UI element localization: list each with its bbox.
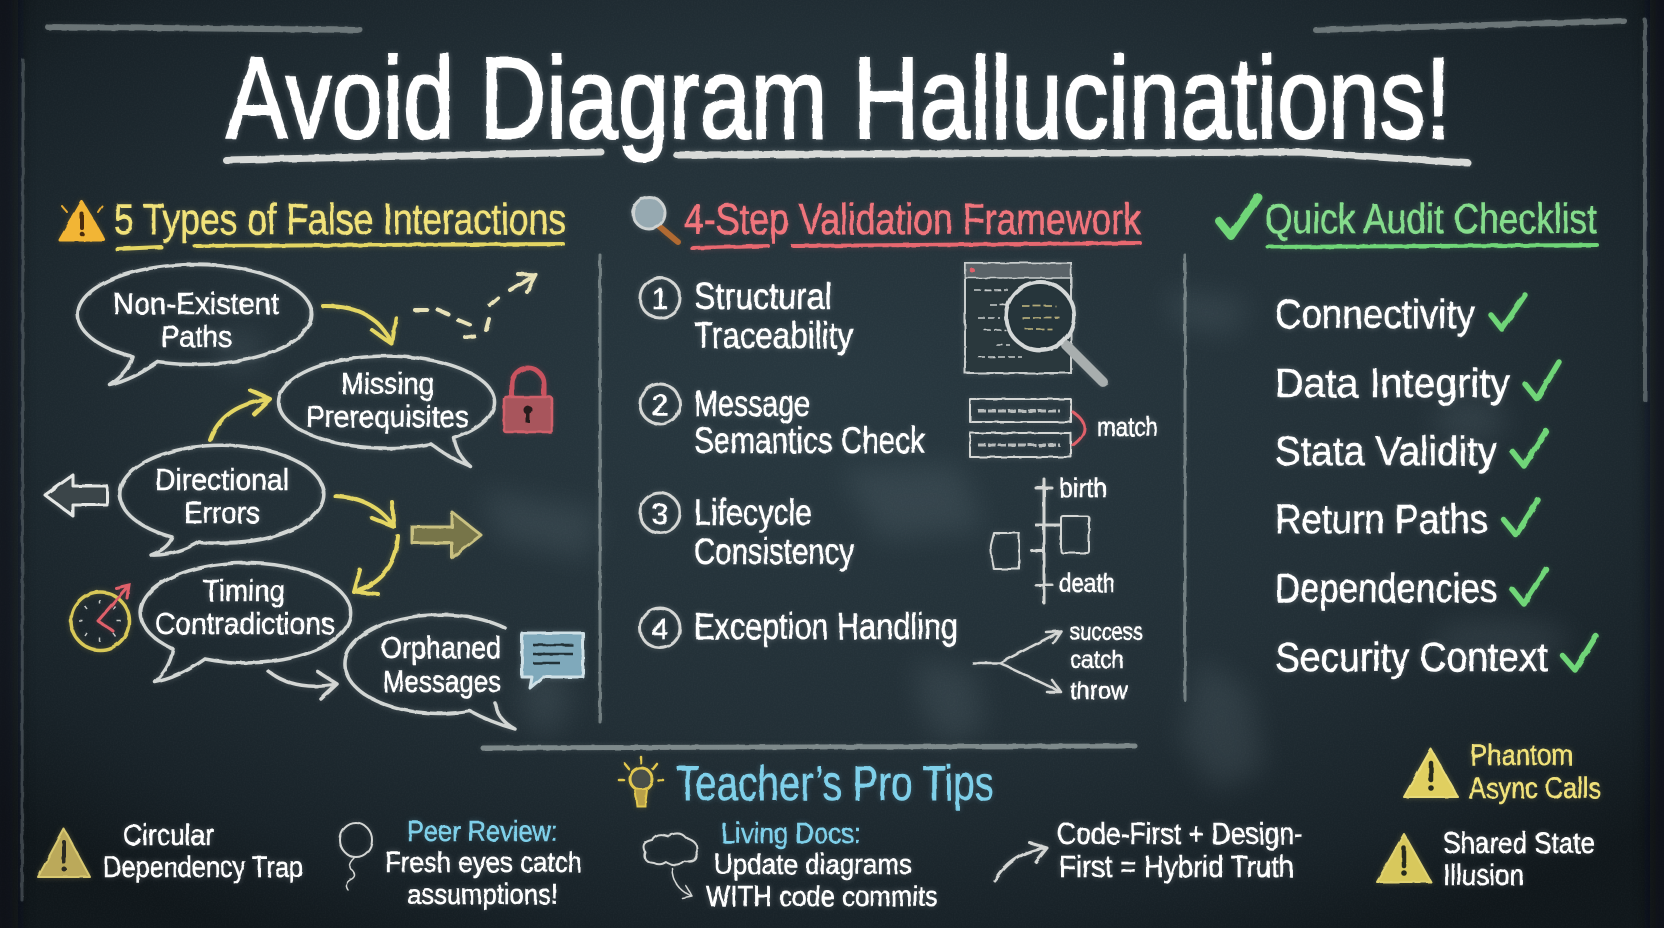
bubble: directional errors: Directional bbox=[155, 462, 289, 497]
icon: exception branches: catch bbox=[1070, 646, 1124, 674]
tip: circular dependency trap bbox=[38, 819, 303, 884]
panel: 5 types of false interactions bbox=[45, 195, 583, 729]
bubble: timing contradictions: Timing bbox=[203, 573, 285, 608]
bubble: orphaned messages: Messages bbox=[383, 664, 501, 699]
item: security context: Security Context bbox=[1275, 634, 1549, 680]
icon: heading check bbox=[1219, 197, 1258, 236]
callout: phantom async calls: Phantom bbox=[1470, 739, 1573, 772]
heading: pro tips: Teacher’s Pro Tips bbox=[676, 757, 994, 811]
callout: shared state illusion bbox=[1377, 827, 1595, 892]
heading: validation: 4-Step Validation Framework bbox=[684, 195, 1142, 244]
tip: peer review bbox=[340, 816, 582, 911]
bubble: missing prerequisites: Missing bbox=[341, 366, 434, 401]
panel: teacher's pro tips bbox=[38, 757, 1303, 913]
bubble: non-existent paths bbox=[78, 265, 312, 385]
bubble: missing prerequisites bbox=[279, 356, 495, 466]
icon: lifecycle timeline: birth bbox=[1059, 473, 1107, 503]
item: return paths: Return Paths bbox=[1275, 496, 1488, 542]
step 3: lifecycle consistency: Lifecycle bbox=[694, 492, 812, 533]
step 2: message semantics check: Semantics Check bbox=[694, 420, 925, 461]
step 3: lifecycle consistency: Consistency bbox=[694, 531, 854, 572]
icon: red padlock bbox=[504, 368, 552, 432]
arrow: timing to orphaned bbox=[268, 671, 337, 699]
tip: circular dependency trap: Circular bbox=[123, 819, 214, 852]
step 4: exception handling bbox=[640, 606, 958, 648]
tip: peer review: assumptions! bbox=[407, 879, 558, 911]
step 1: structural traceability bbox=[640, 276, 853, 356]
icon: exception branches: success bbox=[1070, 618, 1143, 646]
heading: checklist: Quick Audit Checklist bbox=[1265, 195, 1597, 242]
tip: living docs: Living Docs: bbox=[721, 818, 861, 850]
icon: matching messages bbox=[970, 399, 1158, 457]
bubble: orphaned messages: Orphaned bbox=[381, 630, 501, 665]
tip: hybrid truth: First = Hybrid Truth bbox=[1059, 849, 1294, 884]
bubble: timing contradictions bbox=[141, 563, 351, 682]
icon: warning triangle orange bbox=[60, 202, 104, 240]
bubble: non-existent paths: Non-Existent bbox=[113, 286, 279, 321]
callout: shared state illusion: Illusion bbox=[1443, 859, 1524, 892]
tip: hybrid truth: Code-First + Design- bbox=[1057, 816, 1303, 851]
step 2: message semantics check: 2 bbox=[652, 389, 668, 422]
callout: phantom async calls bbox=[1404, 739, 1601, 805]
arrow: directional to prerequisites bbox=[210, 390, 270, 440]
icon: heading magnifier bbox=[633, 197, 678, 242]
bubble: orphaned messages bbox=[345, 615, 515, 729]
tip: hybrid truth bbox=[995, 816, 1303, 884]
step 2: message semantics check bbox=[640, 383, 925, 461]
icon: left hollow arrow bbox=[45, 475, 107, 516]
tip: living docs: WITH code commits bbox=[706, 881, 938, 913]
step 1: structural traceability: Structural bbox=[694, 276, 832, 317]
icon: exception branches bbox=[973, 618, 1143, 705]
icon: exception branches: throw bbox=[1070, 677, 1129, 705]
icon: clock bbox=[71, 585, 129, 650]
step 1: structural traceability: Traceability bbox=[694, 315, 853, 356]
step 4: exception handling: Exception Handling bbox=[694, 606, 958, 647]
icon: lifecycle timeline bbox=[991, 473, 1115, 603]
callout: shared state illusion: Shared State bbox=[1443, 827, 1595, 860]
step 2: message semantics check: Message bbox=[694, 383, 810, 424]
bubble: non-existent paths: Paths bbox=[161, 319, 232, 354]
tip: living docs: Update diagrams bbox=[714, 849, 912, 881]
item: dependencies: Dependencies bbox=[1275, 565, 1497, 611]
bubble: directional errors: Errors bbox=[184, 495, 260, 530]
arrow: paths to prerequisites bbox=[323, 306, 396, 344]
bubble: missing prerequisites: Prerequisites bbox=[306, 399, 469, 434]
bubble: timing contradictions: Contradictions bbox=[155, 606, 335, 641]
panel: quick audit checklist bbox=[1219, 195, 1597, 680]
panel: 4-step validation framework bbox=[633, 195, 1158, 705]
tip: circular dependency trap: Dependency Trap bbox=[103, 851, 303, 884]
heading: false interactions: 5 Types of False Interactions bbox=[114, 195, 566, 244]
icon: code window with magnifier bbox=[965, 263, 1103, 382]
step 4: exception handling: 4 bbox=[652, 613, 668, 646]
tip: living docs bbox=[644, 818, 938, 913]
icon: chat bubble bbox=[522, 633, 583, 688]
item: stata validity: Stata Validity bbox=[1275, 428, 1497, 474]
callout: phantom async calls: Async Calls bbox=[1469, 772, 1601, 805]
icon: right yellow arrow bbox=[412, 512, 481, 558]
tip: peer review: Fresh eyes catch bbox=[385, 847, 582, 879]
icon: lifecycle timeline: death bbox=[1059, 568, 1115, 598]
tip: peer review: Peer Review: bbox=[407, 816, 558, 848]
step 1: structural traceability: 1 bbox=[652, 283, 668, 316]
arrow: back to timing bbox=[354, 536, 398, 594]
item: connectivity: Connectivity bbox=[1275, 291, 1475, 337]
item: data integrity: Data Integrity bbox=[1275, 360, 1510, 406]
bubble: directional errors bbox=[120, 445, 324, 555]
arrow: dashed path bbox=[415, 274, 536, 337]
arrow: directional onward bbox=[335, 496, 394, 527]
step 3: lifecycle consistency: 3 bbox=[652, 498, 668, 531]
icon: light bulb bbox=[619, 757, 663, 806]
icon: matching messages: match bbox=[1097, 412, 1158, 442]
step 3: lifecycle consistency bbox=[640, 492, 854, 572]
